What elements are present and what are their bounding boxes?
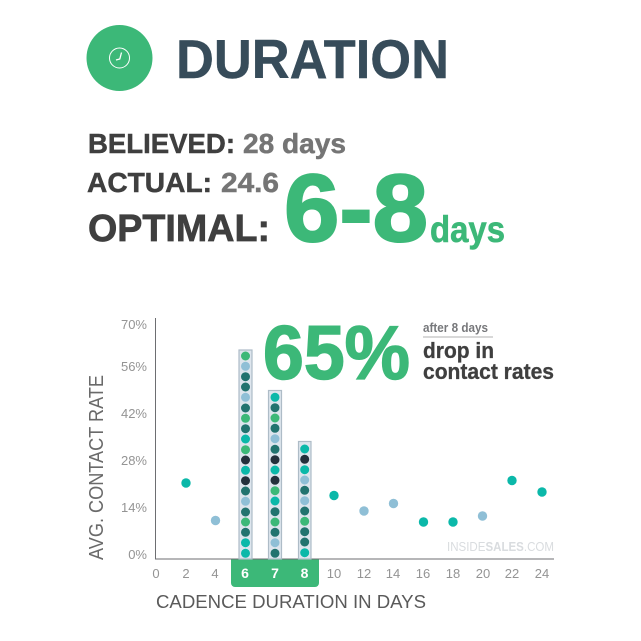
icon: clock in green circle bbox=[86, 25, 152, 91]
column: 7 days bbox=[268, 390, 282, 559]
text block: optimal: 6-8 bbox=[284, 155, 428, 262]
callout: 65% drop in contact rates: 65% bbox=[263, 311, 410, 396]
x axis labels: 4 bbox=[211, 566, 219, 581]
column: 8 days bbox=[298, 442, 311, 559]
y axis labels: 56% bbox=[121, 359, 147, 374]
text block: optimal: days bbox=[430, 209, 505, 250]
chart: contact rate by cadence duration bbox=[86, 317, 554, 612]
x axis labels: 0 bbox=[152, 566, 160, 581]
x axis labels: 24 bbox=[535, 566, 549, 581]
y axis title: AVG. CONTACT RATE bbox=[86, 375, 108, 560]
x axis labels: 14 bbox=[386, 566, 400, 581]
column: 6 days bbox=[239, 350, 252, 559]
callout: 65% drop in contact rates: drop in bbox=[423, 338, 494, 363]
highlighted x labels: 6 bbox=[241, 565, 249, 581]
x axis labels: 20 bbox=[476, 566, 490, 581]
highlighted x axis range bbox=[231, 559, 319, 587]
x axis title: CADENCE DURATION IN DAYS bbox=[156, 592, 426, 612]
highlighted x labels: 8 bbox=[301, 565, 309, 581]
text block: actual: ACTUAL: bbox=[87, 167, 212, 198]
x axis labels: 2 bbox=[182, 566, 190, 581]
y axis labels: 0% bbox=[128, 547, 147, 562]
text block: actual: 24.6 bbox=[221, 167, 279, 198]
x axis labels bbox=[152, 566, 549, 581]
y axis labels: 42% bbox=[121, 406, 147, 421]
y axis labels bbox=[121, 317, 147, 562]
x axis labels: 16 bbox=[416, 566, 430, 581]
x axis labels: 12 bbox=[357, 566, 371, 581]
y axis labels: 14% bbox=[121, 500, 147, 515]
text block: actual bbox=[87, 167, 279, 198]
text block: believed: BELIEVED: bbox=[88, 128, 235, 159]
text block: believed: 28 days bbox=[243, 128, 346, 159]
watermark: INSIDESALES.COM bbox=[447, 540, 554, 554]
x axis labels: 18 bbox=[446, 566, 460, 581]
title: DURATION bbox=[176, 28, 449, 90]
callout: 65% drop in contact rates: after 8 days bbox=[423, 321, 488, 335]
highlighted x labels: 7 bbox=[271, 565, 279, 581]
text block: believed bbox=[88, 128, 346, 159]
x axis labels: 22 bbox=[505, 566, 519, 581]
highlighted x labels bbox=[241, 565, 309, 581]
axes bbox=[156, 318, 554, 559]
y axis labels: 28% bbox=[121, 453, 147, 468]
x axis labels: 10 bbox=[327, 566, 341, 581]
scatter points bbox=[181, 476, 547, 527]
text block: optimal: OPTIMAL: bbox=[88, 208, 270, 250]
text block: optimal bbox=[88, 155, 505, 262]
callout: 65% drop in contact rates bbox=[263, 311, 554, 396]
y axis labels: 70% bbox=[121, 317, 147, 332]
callout: 65% drop in contact rates: contact rates bbox=[423, 359, 554, 384]
